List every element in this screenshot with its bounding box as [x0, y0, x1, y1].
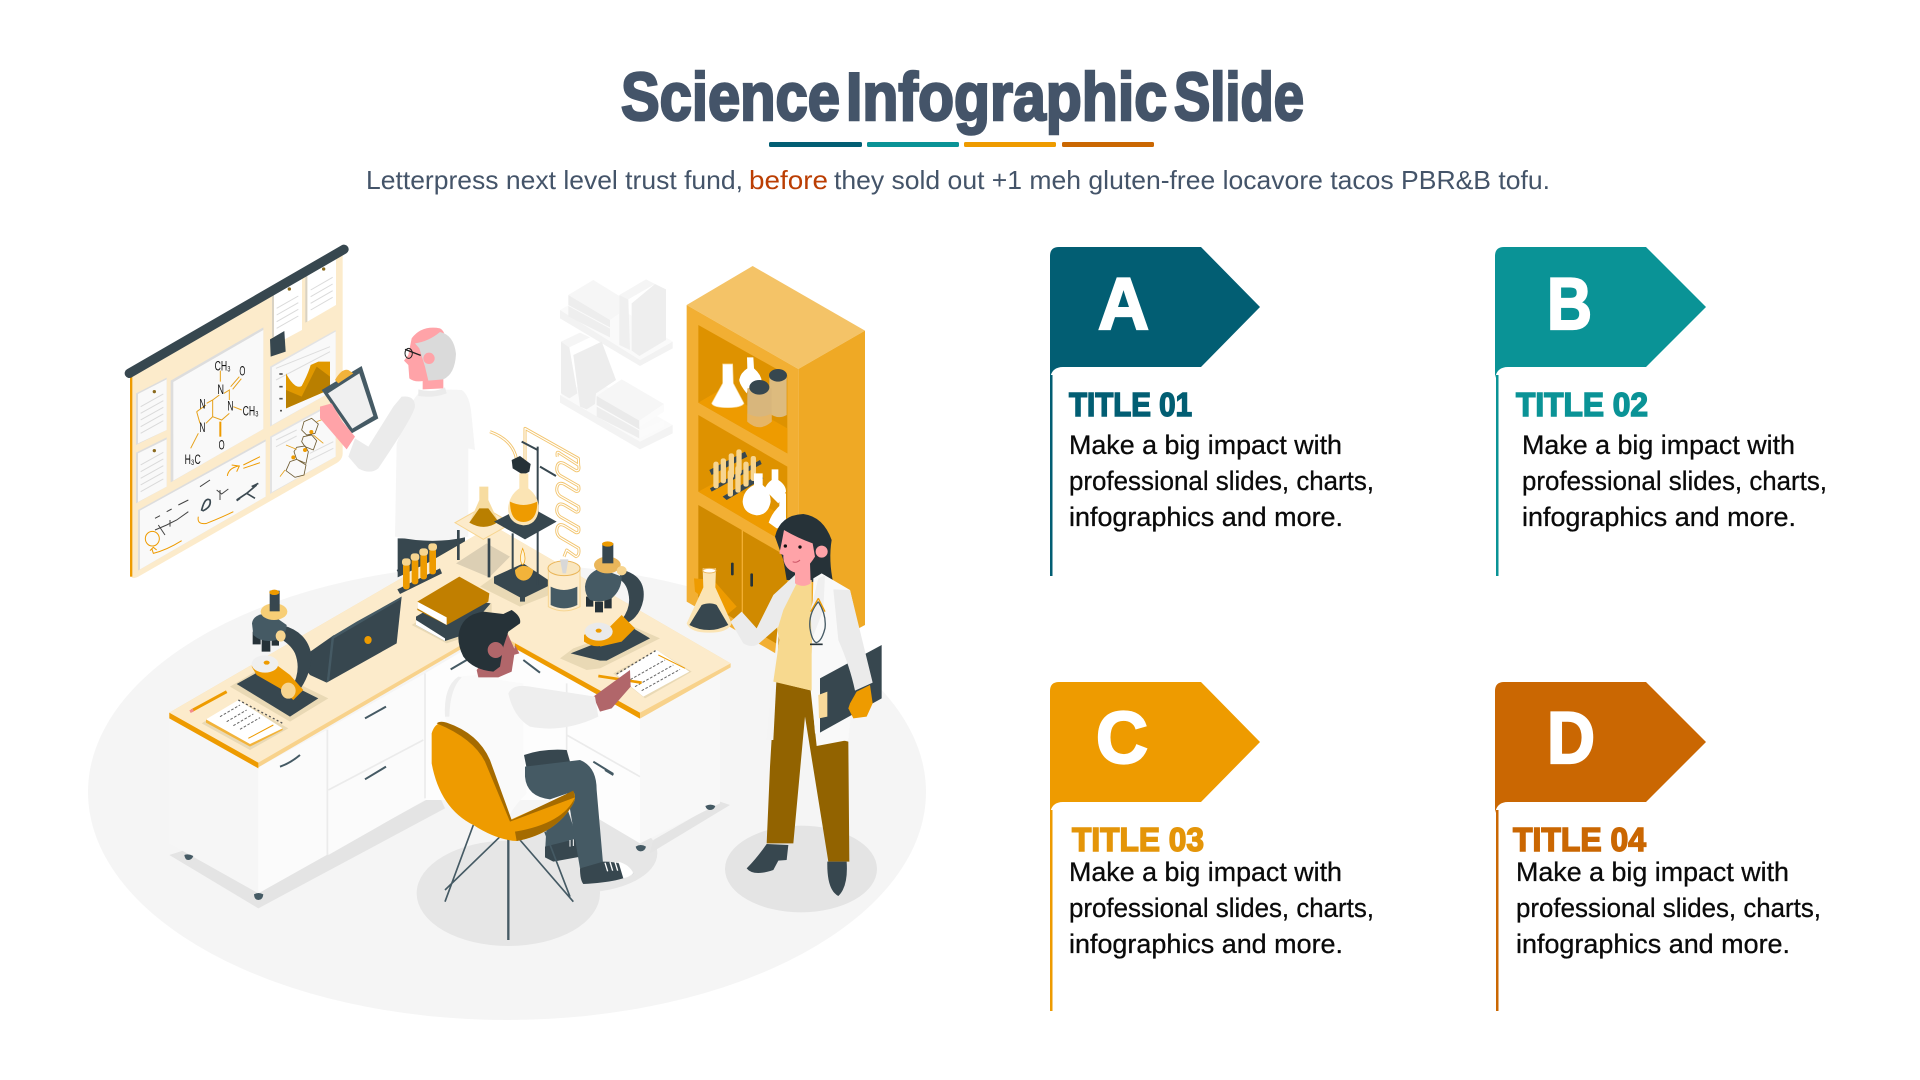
- bookcase: [687, 266, 865, 667]
- title underline bars: [769, 142, 1154, 147]
- floor shadows: [169, 793, 730, 908]
- body B: infographics and more.: [1522, 502, 1796, 532]
- title: [621, 59, 1304, 135]
- arm and hand: [508, 670, 631, 729]
- side face: [169, 718, 258, 893]
- face: [779, 530, 828, 586]
- letter C: C: [1096, 698, 1148, 779]
- note cards: [136, 257, 336, 503]
- body B: Make a big impact with: [1522, 430, 1795, 460]
- icon: test tubes and flasks on middle shelf: [709, 449, 786, 528]
- sleeves: [731, 575, 873, 691]
- shadow: [725, 826, 877, 912]
- desk items left: [190, 577, 492, 750]
- molecule diagram: O: [239, 363, 245, 379]
- tubing coil: [490, 428, 579, 557]
- body C: infographics and more.: [1069, 929, 1343, 959]
- title: Infographic: [846, 59, 1167, 135]
- whiteboard scribbles card: [138, 439, 266, 571]
- arrow tag B: [1495, 247, 1706, 378]
- divider A: [1050, 375, 1052, 576]
- chair: [432, 722, 575, 940]
- body D: infographics and more.: [1516, 929, 1790, 959]
- molecule diagram: N: [227, 398, 233, 414]
- seated scientist on chair: [417, 610, 633, 946]
- hexagon chem card: [270, 401, 336, 494]
- body A: [1069, 430, 1374, 532]
- rear leg and shoe: [545, 807, 581, 862]
- arm and hand: [320, 396, 415, 472]
- body A: professional slides, charts,: [1069, 466, 1374, 496]
- title: Science: [621, 59, 840, 135]
- hair back: [775, 514, 833, 583]
- heading A: TITLE 01: [1069, 386, 1192, 423]
- molecule diagram: CH₃: [243, 403, 259, 419]
- body C: professional slides, charts,: [1069, 893, 1374, 923]
- molecule diagram: O: [219, 436, 225, 452]
- books: [412, 577, 492, 643]
- divider B: [1496, 375, 1498, 576]
- right notebook: [598, 650, 692, 698]
- subtitle: they sold out +1 meh gluten-free locavore tacos PBR&B tofu.: [834, 165, 1550, 195]
- notebook and pencil: [190, 692, 288, 750]
- clipboard: [322, 366, 378, 433]
- cabinets: [184, 635, 720, 900]
- arrow tag A: [1050, 247, 1260, 378]
- neck and head: [404, 328, 456, 397]
- body A: Make a big impact with: [1069, 430, 1342, 460]
- distillation apparatus: [480, 428, 660, 670]
- small table with flask: [455, 487, 512, 577]
- lab coat: [395, 390, 475, 541]
- arrow tag D: [1495, 682, 1706, 813]
- head: [458, 610, 520, 677]
- panel: A: [1050, 247, 1374, 576]
- panel: B: [1495, 247, 1827, 576]
- divider D: [1496, 810, 1498, 1011]
- body B: [1522, 430, 1827, 532]
- body D: Make a big impact with: [1516, 857, 1789, 887]
- stethoscope: [810, 598, 825, 644]
- desktop surface: [169, 525, 731, 768]
- old scientist with clipboard: [320, 328, 475, 577]
- stand plate and poles: [494, 442, 557, 585]
- subtitle: [366, 165, 1550, 195]
- molecule diagram: N: [217, 381, 224, 397]
- seated legs: [524, 750, 633, 884]
- letter A: A: [1098, 264, 1149, 345]
- torso: [445, 675, 527, 820]
- heading B: TITLE 02: [1516, 386, 1648, 423]
- subtitle: Letterpress next level trust fund,: [366, 165, 743, 195]
- laptop: [298, 597, 402, 683]
- body A: infographics and more.: [1069, 502, 1343, 532]
- molecule diagram: H₃C: [185, 452, 201, 468]
- molecule diagram: N: [199, 396, 205, 412]
- molecule diagram: N: [199, 419, 205, 435]
- coat and shirt: [767, 573, 872, 746]
- icon: flasks on top shelf: [712, 357, 787, 427]
- subtitle: before: [749, 165, 828, 195]
- right microscope: [560, 541, 660, 670]
- flask in hand: [687, 568, 737, 633]
- body C: Make a big impact with: [1069, 857, 1342, 887]
- clipboard: [820, 645, 882, 733]
- panel: D: [1495, 682, 1821, 1011]
- wall board with notes: [129, 249, 344, 578]
- round flask: [508, 473, 539, 525]
- boots: [747, 844, 847, 896]
- divider C: [1050, 810, 1052, 1011]
- pants: [767, 682, 849, 862]
- lab desk: [169, 525, 731, 908]
- molecule diagram: CH₃: [215, 359, 231, 374]
- body C: [1069, 857, 1374, 959]
- test tube rack: [397, 543, 442, 594]
- chair shadow: [417, 841, 600, 946]
- body D: [1516, 857, 1821, 959]
- left microscope: [230, 590, 328, 722]
- arrow tag C: [1050, 682, 1260, 813]
- ghost book shelves: [560, 279, 673, 449]
- heading C: TITLE 03: [1072, 821, 1204, 858]
- body B: professional slides, charts,: [1522, 466, 1827, 496]
- letter D: D: [1547, 698, 1595, 779]
- heading D: TITLE 04: [1513, 821, 1647, 858]
- jar: [548, 559, 580, 611]
- panel: C: [1050, 682, 1374, 1011]
- board top bar: [129, 249, 344, 373]
- clipboard clip and hand: [818, 685, 873, 718]
- molecule diagram: [171, 327, 263, 482]
- pants: [398, 534, 465, 577]
- standing scientist with flask: [687, 514, 882, 912]
- letter B: B: [1547, 264, 1592, 345]
- stand base and burner: [480, 548, 553, 607]
- area chart card: [270, 330, 336, 427]
- title: Slide: [1174, 59, 1304, 135]
- floor ellipse: [88, 564, 926, 1020]
- body D: professional slides, charts,: [1516, 893, 1821, 923]
- panel: illustration of science lab: [88, 249, 926, 1020]
